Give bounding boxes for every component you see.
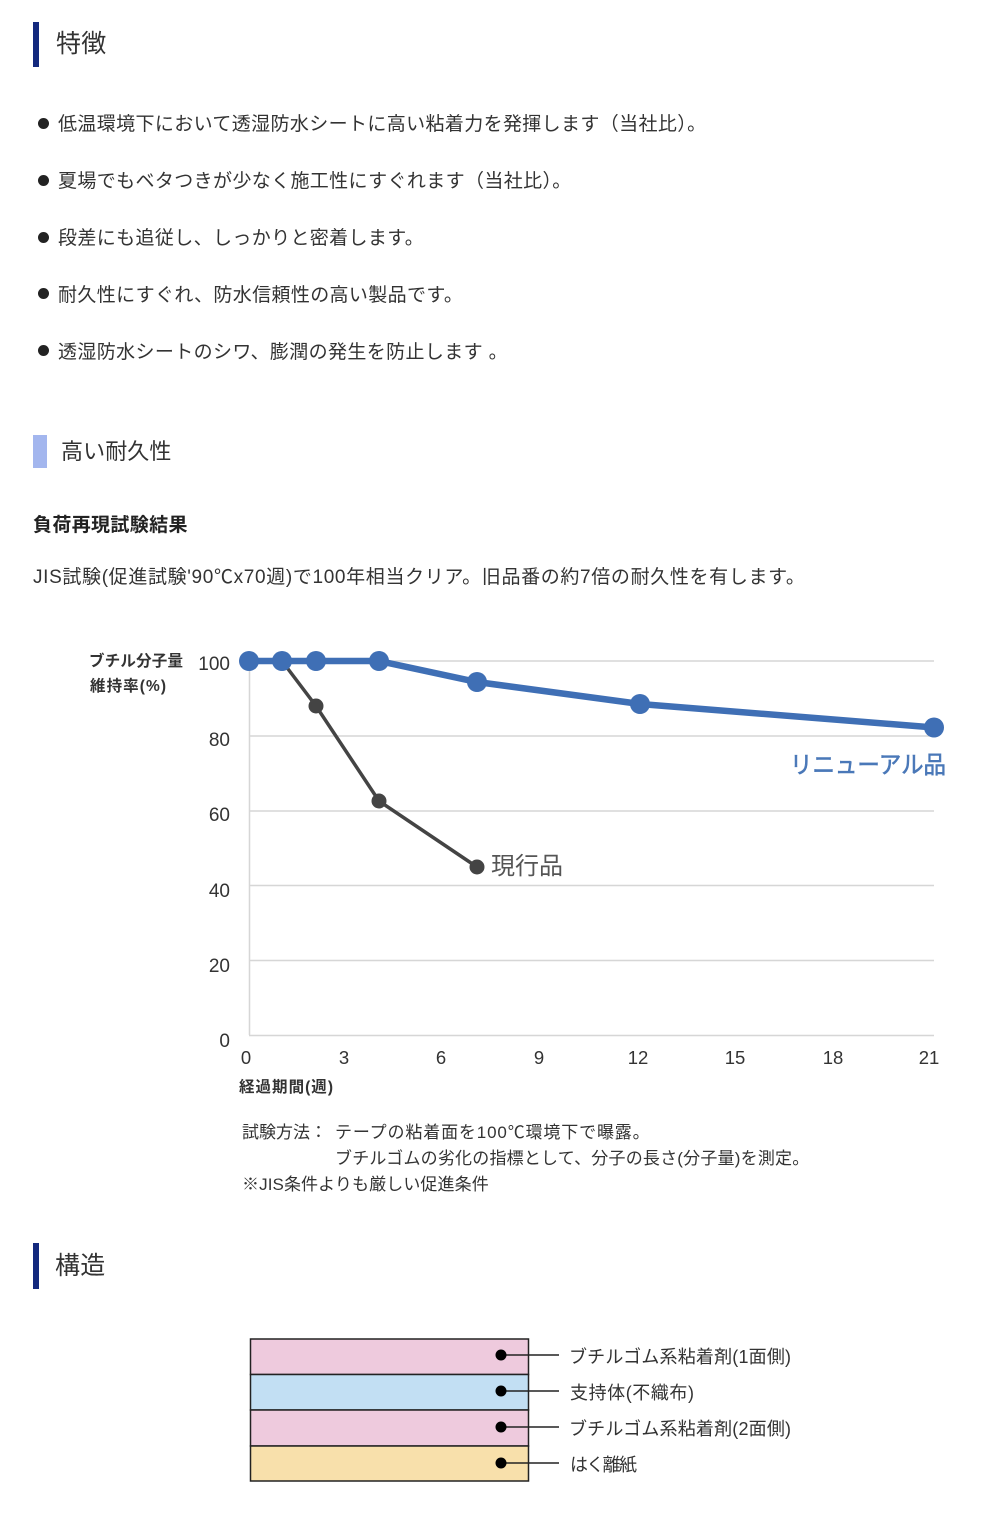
layer: release paper xyxy=(250,1446,528,1481)
bullet 5: 透湿防水シートのシワ、膨潤の発生を防止します 。 xyxy=(58,342,508,363)
structure diagram xyxy=(250,1338,791,1482)
y axis labels: 100 xyxy=(198,654,230,675)
y axis labels: 0 xyxy=(219,1031,230,1052)
x axis labels: 0 xyxy=(241,1047,251,1068)
method label: 試験方法： xyxy=(242,1123,327,1142)
test method note xyxy=(242,1123,809,1194)
heading text: 構造 xyxy=(55,1252,105,1280)
y axis title: ブチル分子量 xyxy=(89,651,183,670)
x axis labels: 15 xyxy=(725,1047,745,1068)
layer: support xyxy=(250,1374,528,1410)
test result description: JIS試験(促進試験'90℃x70週)で100年相当クリア。旧品番の約7倍の耐久性を有します。 xyxy=(33,567,806,588)
bullet 1: 低温環境下において透湿防水シートに高い粘着力を発揮します（当社比）。 xyxy=(58,114,707,135)
layer labels: 支持体(不織布) xyxy=(570,1383,694,1403)
y axis labels xyxy=(198,654,230,1052)
heading: 構造 xyxy=(33,1243,105,1289)
line chart xyxy=(89,651,946,1096)
x axis labels: 21 xyxy=(919,1047,939,1068)
subheading bar xyxy=(33,435,47,468)
x axis labels: 12 xyxy=(628,1047,648,1068)
bullet 3: 段差にも追従し、しっかりと密着します。 xyxy=(58,228,424,249)
x axis labels: 6 xyxy=(436,1047,446,1068)
x axis title: 経過期間(週) xyxy=(239,1078,333,1096)
layer: adhesive side 1 xyxy=(250,1339,528,1374)
layer: adhesive side 2 xyxy=(250,1410,528,1446)
series: 現行品 xyxy=(282,661,484,874)
method line 3: ※JIS条件よりも厳しい促進条件 xyxy=(242,1175,489,1194)
x axis labels: 3 xyxy=(339,1047,349,1068)
label: リニューアル品: リニューアル品 xyxy=(790,752,946,779)
layer labels xyxy=(569,1346,791,1475)
leader lines xyxy=(496,1350,559,1468)
heading bar xyxy=(33,1243,39,1289)
x axis labels: 9 xyxy=(534,1047,544,1068)
y axis labels: 60 xyxy=(209,805,230,826)
test result title: 負荷再現試験結果 xyxy=(33,515,188,536)
y axis labels: 20 xyxy=(209,956,230,977)
heading text: 特徴 xyxy=(56,30,106,58)
series: リニューアル品 xyxy=(239,651,944,738)
y axis title: 維持率(%) xyxy=(90,677,166,695)
layer labels: ブチルゴム系粘着剤(1面側) xyxy=(569,1346,791,1367)
method line 2: ブチルゴムの劣化の指標として、分子の長さ(分子量)を測定。 xyxy=(335,1149,809,1168)
y axis title xyxy=(89,651,183,695)
x axis labels xyxy=(241,1047,939,1068)
subheading text: 高い耐久性 xyxy=(61,439,172,464)
bullet 4: 耐久性にすぐれ、防水信頼性の高い製品です。 xyxy=(58,285,463,306)
y axis labels: 80 xyxy=(209,730,230,751)
y axis labels: 40 xyxy=(209,881,230,902)
heading bar xyxy=(33,22,39,67)
x axis labels: 18 xyxy=(823,1047,843,1068)
bullet 2: 夏場でもベタつきが少なく施工性にすぐれます（当社比）。 xyxy=(58,171,572,192)
heading: 特徴 xyxy=(33,22,106,67)
subheading: 高い耐久性 xyxy=(33,435,172,468)
method line 1: テープの粘着面を100℃環境下で曝露。 xyxy=(335,1123,650,1142)
label: 現行品: 現行品 xyxy=(491,853,563,880)
layer labels: ブチルゴム系粘着剤(2面側) xyxy=(569,1418,791,1439)
layer labels: はく離紙 xyxy=(570,1455,637,1475)
